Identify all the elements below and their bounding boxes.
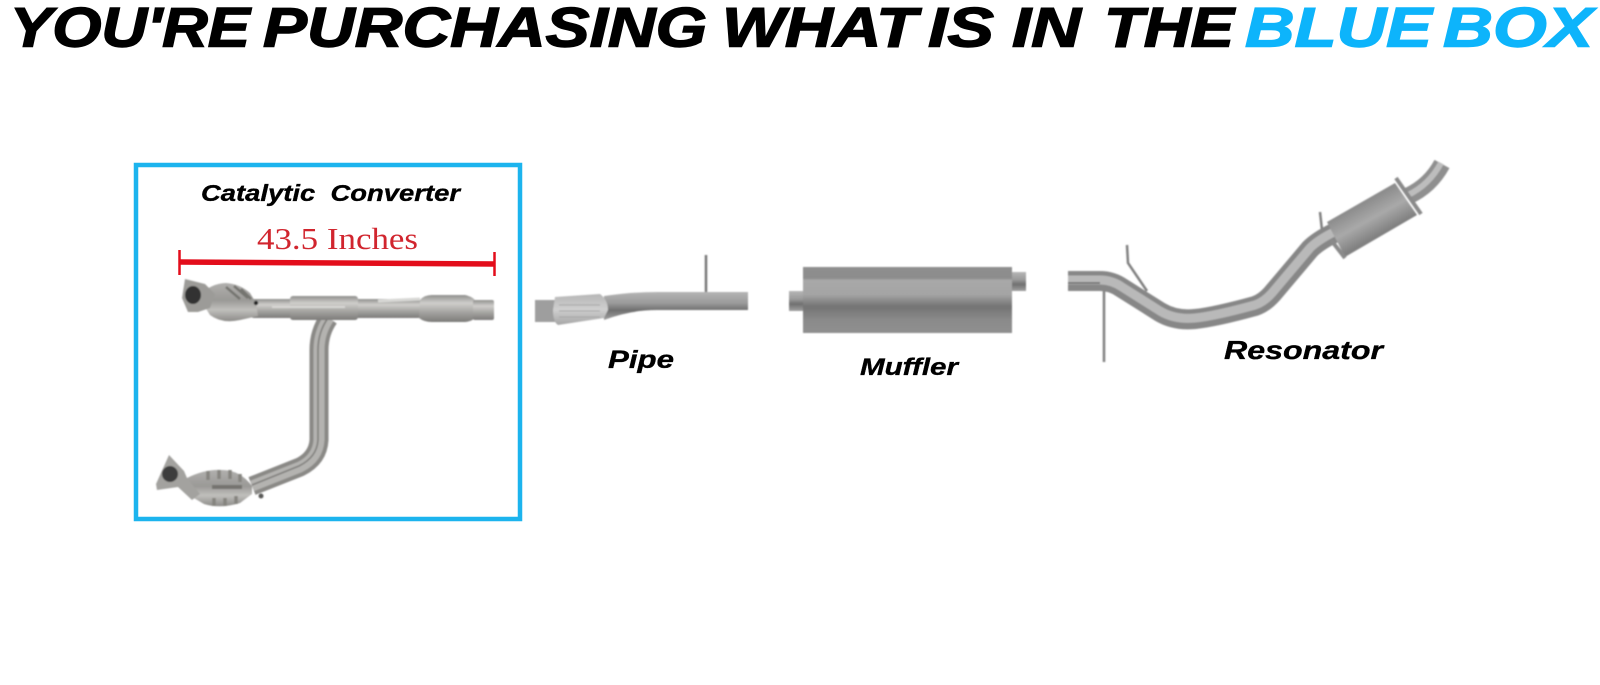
main tube — [1068, 232, 1334, 319]
inline cylinder and tip — [419, 295, 476, 322]
down pipe — [252, 318, 329, 486]
label: pipe: Pipe — [608, 346, 674, 374]
label: resonator: Resonator — [1224, 335, 1385, 365]
part: resonator — [1068, 163, 1442, 362]
resonator body — [1327, 183, 1417, 257]
catalytic converter assembly — [156, 279, 494, 506]
part: muffler — [789, 267, 1026, 333]
upper flange — [182, 279, 215, 312]
heading: catalytic converter: Catalytic Converter — [201, 180, 461, 206]
label: muffler: Muffler — [860, 354, 960, 381]
upper converter — [198, 283, 258, 321]
dimension line — [179, 250, 494, 276]
flex joint — [535, 300, 557, 322]
dimension label: 43.5 Inches — [257, 221, 418, 256]
title — [10, 0, 1597, 58]
tube — [604, 292, 748, 320]
tail pipe — [1408, 163, 1442, 196]
lower flange — [156, 455, 200, 500]
hanger — [705, 255, 707, 294]
main pipe — [250, 299, 422, 318]
hangers — [1104, 212, 1329, 362]
lower converter — [187, 470, 252, 506]
part: pipe — [535, 255, 748, 325]
panel: catalytic converter blue box — [136, 165, 520, 519]
